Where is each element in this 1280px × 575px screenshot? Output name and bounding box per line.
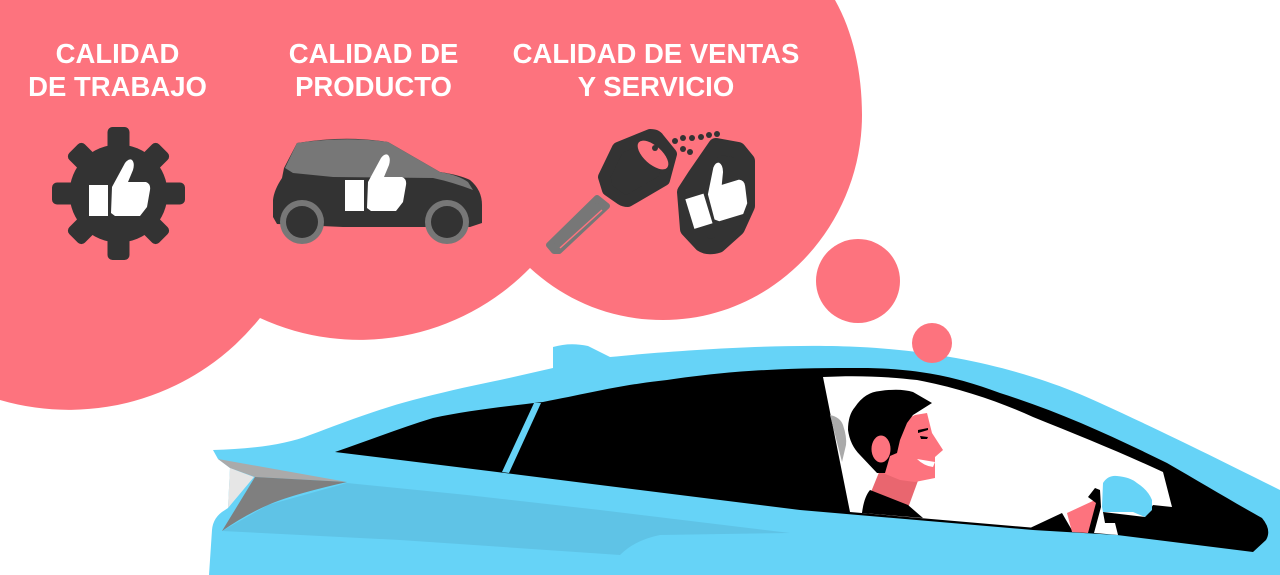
rear spoiler and tail light bbox=[218, 459, 347, 531]
seat headrest bbox=[830, 415, 846, 462]
thought bubble: small dot bbox=[912, 323, 952, 363]
driver bbox=[848, 390, 943, 518]
icon: key and fob with thumbs up bbox=[549, 131, 753, 251]
side mirror bbox=[1102, 476, 1152, 517]
front window bbox=[823, 376, 1172, 535]
thought bubble: large dot bbox=[816, 239, 900, 323]
heading: calidad de ventas y servicio: Y SERVICIO bbox=[578, 71, 734, 102]
car bbox=[209, 344, 1280, 575]
heading: calidad de trabajo: DE TRABAJO bbox=[28, 71, 207, 102]
side windows bbox=[335, 368, 1268, 552]
icon: gear with thumbs up bbox=[52, 127, 185, 260]
driver arm and hand bbox=[1030, 500, 1097, 533]
heading: calidad de trabajo: CALIDAD bbox=[56, 38, 179, 69]
steering wheel bbox=[1088, 488, 1101, 533]
thought bubble: three lobes bbox=[0, 0, 862, 410]
heading: calidad de producto: CALIDAD DE bbox=[289, 38, 458, 69]
icon: car with thumbs up bbox=[273, 139, 482, 244]
heading: calidad de producto: PRODUCTO bbox=[295, 71, 452, 102]
window pillar bbox=[502, 403, 541, 473]
heading: calidad de ventas y servicio: CALIDAD DE VENTAS bbox=[513, 38, 799, 69]
car body bbox=[209, 344, 1280, 575]
car body shading bbox=[222, 483, 790, 555]
